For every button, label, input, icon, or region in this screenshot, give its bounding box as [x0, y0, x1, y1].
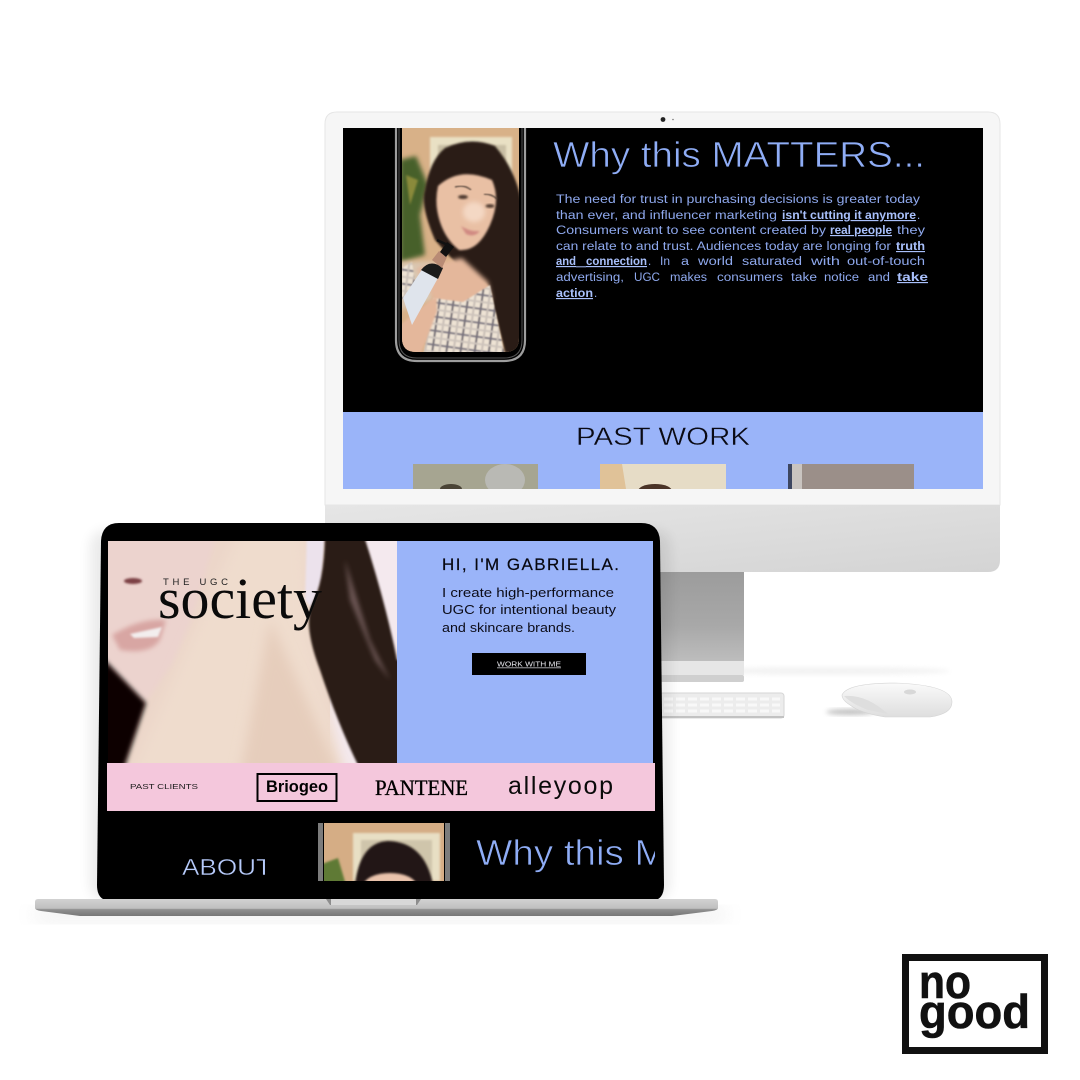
body paragraph: and: [556, 256, 576, 268]
body paragraph: a: [681, 256, 690, 268]
body paragraph: consumers: [717, 272, 783, 284]
Alleyoop logo: alleyoop: [508, 772, 613, 800]
work with me button: [472, 653, 586, 675]
body paragraph: advertising,: [556, 272, 624, 284]
Briogeo logo: Briogeo: [266, 777, 328, 796]
body paragraph: saturated: [742, 256, 802, 268]
body paragraph: take: [897, 272, 928, 284]
body paragraph: notice: [824, 272, 859, 284]
hero body text: [442, 586, 617, 635]
body paragraph: truth: [896, 241, 925, 253]
phone mockup with portrait: [396, 128, 525, 361]
laptop base: [35, 899, 718, 916]
heading: Why this MATTERS: Why this MATTERS...: [553, 134, 925, 175]
Pantene logo: PANTENE: [375, 775, 468, 800]
thumbnail 2: [600, 464, 726, 489]
Briogeo logo: [258, 774, 336, 801]
about heading, clipped: ABOUT: [182, 854, 272, 880]
hero blue panel: [397, 541, 653, 763]
body paragraph: .: [594, 288, 597, 300]
body paragraph: real people: [830, 225, 892, 237]
body paragraph: Consumers want to see content created by: [556, 225, 826, 237]
body paragraph: take: [791, 272, 817, 284]
laptop lid: [97, 523, 664, 901]
no good logo: no: [919, 955, 971, 1008]
laptop mockup: [35, 523, 718, 917]
hero photo: [108, 541, 397, 763]
hero body text: UGC for intentional beauty: [442, 603, 617, 617]
society logotype: THE UGC: [163, 577, 228, 588]
body paragraph: The need for trust in purchasing decisions is greater today: [556, 194, 920, 206]
body paragraph: UGC: [634, 272, 660, 284]
desktop screen: [343, 128, 983, 498]
phone crop on laptop: [318, 823, 450, 881]
desktop computer mockup: [325, 112, 1000, 682]
portrait photo: [400, 128, 524, 356]
body paragraph: action: [556, 288, 593, 300]
body paragraph: .: [917, 210, 920, 222]
body paragraph: world: [697, 256, 733, 268]
body paragraph: and: [868, 272, 890, 284]
keyboard: [640, 693, 784, 718]
body paragraph: than ever, and influencer marketing: [556, 210, 777, 222]
desk shadow under stand: [710, 667, 950, 675]
body paragraph: with: [810, 256, 840, 268]
past work band: [343, 412, 983, 489]
past clients label: PAST CLIENTS: [130, 782, 198, 791]
thumbnail 1: [413, 464, 538, 489]
computer body: [325, 112, 1000, 572]
body paragraph: out-of-touch: [847, 256, 925, 268]
past clients band: [107, 763, 655, 811]
body paragraph: can relate to and trust. Audiences today are longing for: [556, 241, 891, 253]
no good logo: [906, 955, 1044, 1050]
hero body text: I create high-performance: [442, 586, 614, 600]
past work heading: PAST WORK: [576, 423, 750, 451]
body paragraph: they: [897, 225, 925, 237]
society logotype: society: [158, 566, 322, 631]
body paragraph: In: [660, 256, 670, 268]
why this heading, clipped: Why this MATTERS...: [476, 832, 848, 873]
body paragraph: connection: [586, 256, 647, 268]
body paragraph: .: [648, 256, 651, 268]
bottle: [403, 240, 454, 325]
hero heading: HI, I'M GABRIELLA.: [442, 555, 619, 574]
computer stand: [655, 572, 744, 682]
laptop shadow: [90, 530, 670, 900]
body paragraph: isn't cutting it anymore: [782, 210, 916, 222]
laptop base shadow: [35, 910, 725, 919]
hero body text: and skincare brands.: [442, 621, 575, 635]
mouse: [826, 683, 952, 717]
no good logo: good: [919, 985, 1030, 1038]
work with me button: WORK WITH ME: [497, 662, 561, 668]
thumbnail 3: [788, 464, 914, 489]
body paragraph: makes: [670, 272, 707, 284]
body paragraph: [556, 194, 928, 300]
